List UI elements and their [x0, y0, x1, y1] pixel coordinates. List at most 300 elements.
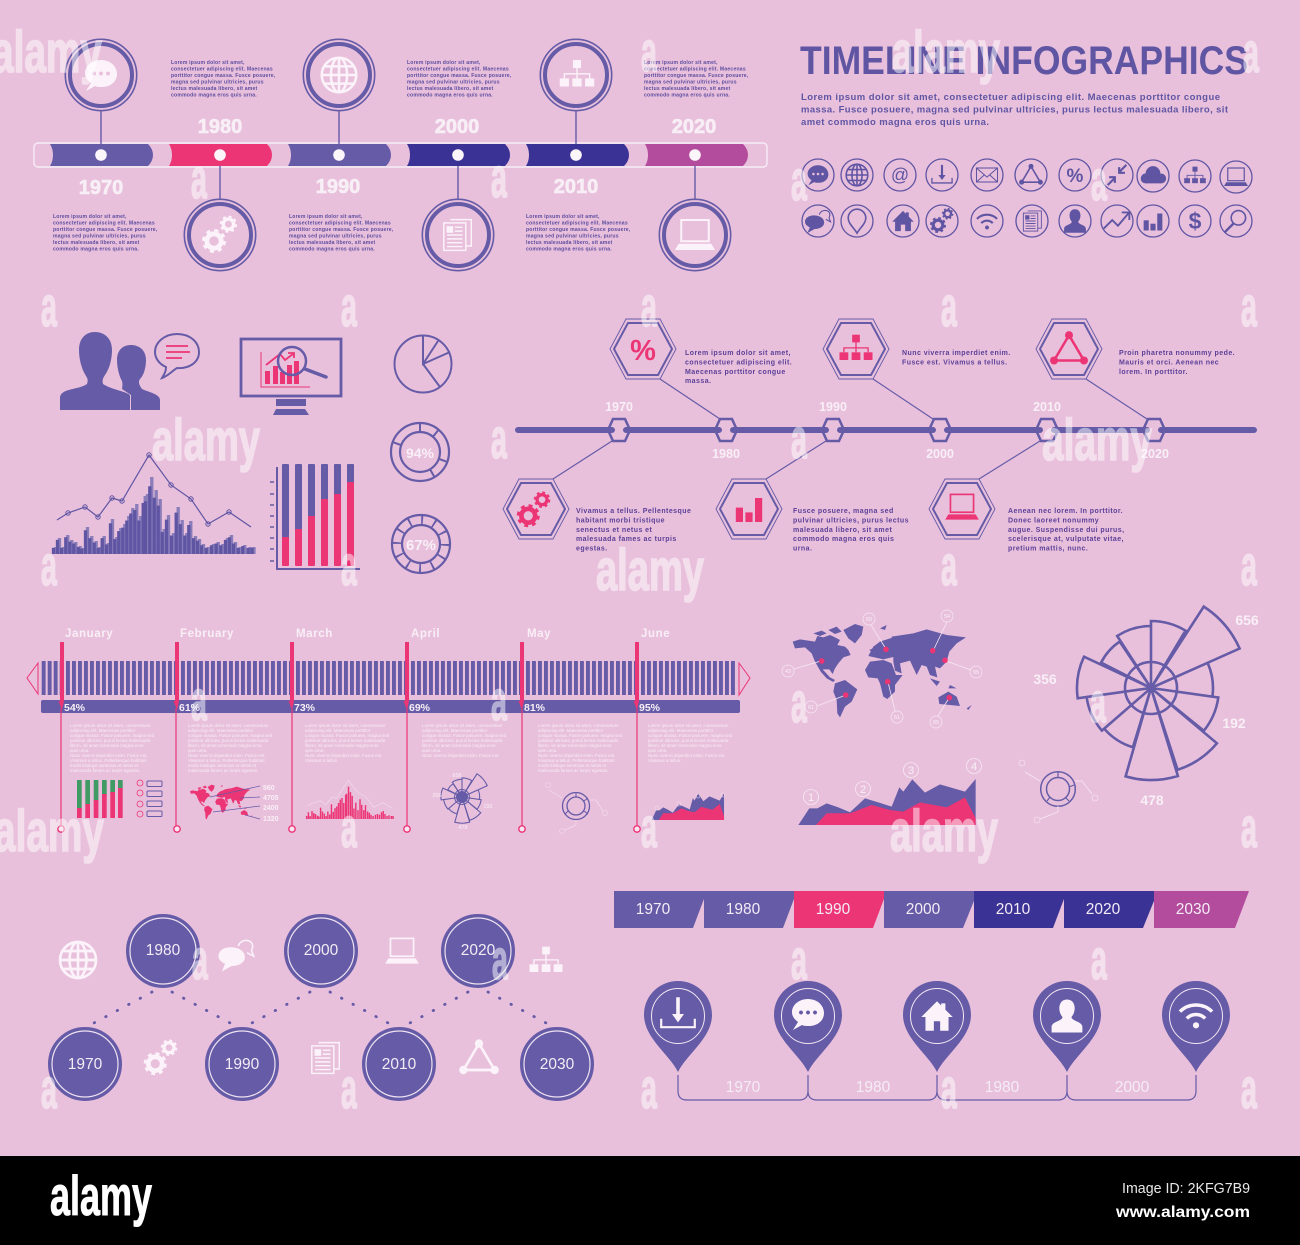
end arrows — [27, 663, 750, 695]
icon: cloud — [1141, 166, 1166, 183]
area numbered markers — [804, 758, 982, 804]
mini bar chart — [307, 780, 393, 819]
mini legend — [137, 780, 162, 817]
June text: adipiscing elit. Maecenas porttitor — [648, 728, 714, 733]
month labels — [65, 628, 670, 640]
icon: gears — [931, 209, 953, 232]
connector lines — [553, 379, 1147, 479]
icon: org chart — [560, 60, 594, 86]
icon: person — [1052, 1000, 1082, 1032]
icon: laptop — [945, 494, 979, 520]
June text: libero, sit amet commodo magna eros — [648, 743, 722, 748]
text block: urna. — [793, 546, 812, 553]
text block: malesuada libero, sit amet — [793, 527, 892, 534]
June text: Lorem ipsum dolor sit amet, consectetuer — [648, 723, 729, 728]
watermarks: a — [492, 927, 508, 992]
May text: pulvinar ultricies, purus lectus malesuada — [538, 738, 619, 743]
watermarks: a — [1241, 274, 1257, 339]
donut 67%: 67% — [406, 537, 436, 554]
mini rose chart: 478 — [458, 825, 468, 831]
watermarks: a — [641, 19, 657, 84]
icon: percent: % — [1067, 166, 1084, 187]
April text: adipiscing elit. Maecenas porttitor — [422, 728, 488, 733]
small donut callout — [1019, 760, 1098, 823]
text block 2010: Lorem ipsum dolor sit amet, — [526, 214, 600, 220]
March text: libero, sit amet commodo magna eros — [305, 743, 379, 748]
year circles: 1980 — [146, 942, 181, 959]
text block 2000: commodo magna eros quis urna. — [407, 92, 493, 98]
icon: speech bubbles — [218, 940, 254, 972]
striped bar — [42, 661, 737, 695]
May text: libero, sit amet commodo magna eros — [538, 743, 612, 748]
area numbers: 4 — [971, 761, 977, 773]
marker stems — [61, 708, 637, 826]
year labels — [79, 116, 716, 199]
mini map callouts — [210, 785, 279, 823]
February text: malesuada fames ac turpis egestas. — [188, 768, 258, 773]
node dots — [95, 149, 701, 161]
panel: dotted circles timeline — [49, 915, 593, 1100]
panel: hexagon timeline — [503, 319, 1254, 553]
month labels: June — [641, 628, 670, 640]
icon: monitor with chart — [241, 339, 341, 415]
mini rose chart: 356 — [432, 793, 442, 799]
mini map callouts: 1320 — [263, 816, 279, 823]
text block 1970: consectetuer adipiscing elit. Maecenas — [53, 220, 155, 226]
watermarks: alamy — [892, 20, 1000, 85]
rose chart — [1033, 607, 1259, 808]
icon: mail — [976, 168, 998, 182]
watermarks: a — [341, 795, 357, 860]
icon: house — [921, 1001, 953, 1031]
watermarks: alamy — [890, 799, 998, 864]
year circles: 2010 — [382, 1056, 417, 1073]
mini rose chart: 656 — [452, 773, 462, 779]
icon: org chart — [840, 335, 872, 360]
watermarks: a — [341, 274, 357, 339]
icon: triangle — [1050, 331, 1088, 365]
icon circles — [802, 159, 1252, 237]
icon: gears — [145, 1040, 176, 1074]
January text: congue massa. Fusce posuere, magna sed — [70, 733, 155, 738]
text block 1980: magna sed pulvinar ultricies, purus — [171, 80, 264, 86]
icon: triangle — [1019, 164, 1043, 185]
panel: year tabs — [614, 891, 1249, 928]
panel: year tabs: 2010 — [996, 901, 1031, 918]
icon: documents — [312, 1043, 339, 1073]
text block 2000: lectus malesuada libero, sit amet — [407, 86, 494, 92]
text block: lorem. In porttitor. — [1119, 369, 1188, 376]
June text: Nunc viverra imperdiet enim. Fusce est. — [648, 753, 725, 758]
watermarks: alamy — [152, 408, 260, 473]
watermarks: a — [1241, 795, 1257, 860]
footer band — [0, 1156, 1300, 1245]
intro paragraph: amet commodo magna eros quis urna. — [801, 117, 989, 128]
area numbers: 1 — [808, 792, 814, 804]
watermarks: a — [341, 1056, 357, 1121]
year labels: 1990 — [316, 176, 360, 198]
text block 1990: lectus malesuada libero, sit amet — [289, 240, 376, 246]
bracket year labels: 1980 — [856, 1079, 891, 1096]
icon: chat — [792, 999, 824, 1030]
text block 1980: consectetuer adipiscing elit. Maecenas — [171, 66, 273, 72]
text block: malesuada fames ac turpis — [576, 536, 677, 543]
icon: documents — [444, 220, 471, 250]
June text: congue massa. Fusce posuere, magna sed — [648, 733, 733, 738]
watermarks: a — [491, 145, 507, 210]
year labels: 1970 — [79, 177, 123, 199]
text block: augue. Suspendisse dui purus, — [1008, 527, 1125, 534]
watermarks: a — [941, 274, 957, 339]
map callout lines — [794, 622, 971, 716]
text block 1970: magna sed pulvinar ultricies, purus — [53, 234, 146, 240]
watermarks: a — [41, 1056, 57, 1121]
January text: pulvinar ultricies, purus lectus malesuada — [70, 738, 151, 743]
icon: gears — [204, 217, 236, 251]
text block 1990: consectetuer adipiscing elit. Maecenas — [289, 220, 391, 226]
text block 2020: commodo magna eros quis urna. — [644, 92, 730, 98]
map numbers — [785, 614, 979, 726]
watermarks: a — [791, 406, 807, 471]
text block: Fusce posuere, magna sed — [793, 508, 894, 515]
watermarks: a — [1241, 1056, 1257, 1121]
map markers — [819, 646, 952, 700]
year labels: 1970 — [605, 400, 633, 414]
percent labels: 73% — [294, 702, 316, 714]
watermarks: a — [1090, 670, 1106, 735]
map labels — [782, 610, 982, 728]
icon: house — [892, 211, 914, 231]
text block 2010: porttitor congue massa. Fusce posuere, — [526, 227, 631, 233]
mini area chart — [652, 793, 725, 820]
text block 2020: Lorem ipsum dolor sit amet, — [644, 60, 718, 66]
percent labels: 69% — [409, 702, 431, 714]
dotted connectors — [92, 992, 548, 1024]
March text: Lorem ipsum dolor sit amet, consectetuer — [305, 723, 386, 728]
percent labels: 61% — [179, 702, 201, 714]
text block 2020: consectetuer adipiscing elit. Maecenas — [644, 66, 746, 72]
map numbers: 61 — [808, 705, 814, 711]
percent labels: 95% — [639, 702, 661, 714]
March text: adipiscing elit. Maecenas porttitor — [305, 728, 371, 733]
watermarks: a — [941, 533, 957, 598]
panel: year tabs: 2000 — [906, 901, 941, 918]
text block 2010: lectus malesuada libero, sit amet — [526, 240, 613, 246]
bracket connectors — [678, 1075, 1196, 1100]
area numbers: 3 — [908, 765, 914, 777]
watermarks: a — [641, 1056, 657, 1121]
text block 1990: commodo magna eros quis urna. — [289, 246, 375, 252]
icon: percent: % — [630, 335, 656, 367]
icon: org chart — [530, 947, 562, 972]
rose chart: 356 — [1033, 671, 1057, 687]
text block: Proin pharetra nonummy pede. — [1119, 350, 1235, 357]
marker ends — [58, 826, 640, 832]
watermarks: a — [1091, 148, 1107, 213]
year circles: 2030 — [540, 1056, 575, 1073]
February text: adipiscing elit. Maecenas porttitor — [188, 728, 254, 733]
text block 1990: magna sed pulvinar ultricies, purus — [289, 234, 382, 240]
text block: habitant morbi tristique — [576, 517, 665, 524]
March text: Vivamus a tellus. — [305, 758, 338, 763]
year circles: 1970 — [68, 1056, 103, 1073]
year labels: 1990 — [819, 400, 847, 414]
February text: Nunc viverra imperdiet enim. Fusce est. — [188, 753, 265, 758]
icon: laptop — [385, 938, 419, 964]
January text: Lorem ipsum dolor sit amet, consectetuer — [70, 723, 151, 728]
text block 1990: Lorem ipsum dolor sit amet, — [289, 214, 363, 220]
watermarks: a — [1091, 927, 1107, 992]
month labels: May — [527, 628, 551, 640]
text block: Donec laoreet nonummy — [1008, 517, 1099, 524]
map numbers: 51 — [894, 715, 900, 721]
year labels: 1980 — [712, 447, 740, 461]
April text: Nunc viverra imperdiet enim. Fusce est. — [422, 753, 499, 758]
area numbers — [808, 761, 977, 804]
mini rose chart: 192 — [483, 804, 493, 810]
February text: congue massa. Fusce posuere, magna sed — [188, 733, 273, 738]
panel: year tabs: 1980 — [726, 901, 761, 918]
watermarks: a — [791, 670, 807, 735]
April text: congue massa. Fusce posuere, magna sed — [422, 733, 507, 738]
year labels: 2010 — [1033, 400, 1061, 414]
text block: massa. — [685, 378, 711, 385]
text block 1970: lectus malesuada libero, sit amet — [53, 240, 140, 246]
icon: download — [661, 997, 695, 1027]
text block 2020: porttitor congue massa. Fusce posuere, — [644, 73, 749, 79]
watermarks: a — [1243, 20, 1259, 85]
bar and line chart — [54, 453, 254, 554]
rose chart: 478 — [1140, 792, 1164, 808]
icon: globe — [846, 164, 868, 186]
text block: Aenean nec lorem. In porttitor. — [1008, 508, 1123, 515]
icon: globe — [322, 58, 356, 92]
text block 1980: porttitor congue massa. Fusce posuere, — [171, 73, 276, 79]
icon: globe — [60, 942, 96, 978]
May text: adipiscing elit. Maecenas porttitor — [538, 728, 604, 733]
watermarks: a — [191, 668, 207, 733]
month labels: April — [411, 628, 440, 640]
mini map callouts: 4705 — [263, 795, 279, 802]
mini rose chart — [432, 773, 493, 831]
icon: bars — [736, 498, 762, 522]
text block: Maecenas porttitor congue — [685, 369, 786, 376]
panel: top circular timeline — [34, 39, 767, 271]
icon: at sign: @ — [891, 165, 909, 185]
icon: documents — [1023, 211, 1041, 231]
year labels: 1980 — [198, 116, 242, 138]
text block 2000: magna sed pulvinar ultricies, purus — [407, 80, 500, 86]
watermarks: a — [341, 533, 357, 598]
June text: Vivamus a tellus. — [648, 758, 681, 763]
text block: scelerisque at, vulputate vitae, — [1008, 536, 1124, 543]
bracket year labels: 2000 — [1115, 1079, 1150, 1096]
rose chart: 192 — [1222, 715, 1246, 731]
June text: pulvinar ultricies, purus lectus malesuada — [648, 738, 729, 743]
percent labels: 54% — [64, 702, 86, 714]
text block 2010: commodo magna eros quis urna. — [526, 246, 612, 252]
panel: year tabs: 2020 — [1086, 901, 1121, 918]
icon: arrows — [1108, 165, 1126, 185]
May text: malesuada fames ac turpis egestas. — [538, 768, 608, 773]
February text: pulvinar ultricies, purus lectus malesuada — [188, 738, 269, 743]
watermarks: a — [941, 1056, 957, 1121]
text block: Vivamus a tellus. Pellentesque — [576, 508, 691, 515]
year circles — [49, 915, 593, 1100]
year labels — [605, 400, 1169, 461]
watermarks: a — [791, 148, 807, 213]
text block 1970: Lorem ipsum dolor sit amet, — [53, 214, 127, 220]
March text: pulvinar ultricies, purus lectus malesuada — [305, 738, 386, 743]
panel: year tabs: 1970 — [636, 901, 671, 918]
icon: dollar: $ — [1189, 208, 1202, 234]
text block: senectus et netus et — [576, 527, 653, 534]
image id: Image ID: 2KFG7B9 — [1122, 1181, 1250, 1197]
text block 1980: Lorem ipsum dolor sit amet, — [171, 60, 245, 66]
February text: morbi tristique senectus et netus et — [188, 763, 257, 768]
text block: egestas. — [576, 546, 608, 553]
website: www.alamy.com — [1115, 1204, 1250, 1221]
watermarks: a — [491, 668, 507, 733]
text block 2000: porttitor congue massa. Fusce posuere, — [407, 73, 512, 79]
text block 2010: consectetuer adipiscing elit. Maecenas — [526, 220, 628, 226]
pin rings — [652, 988, 1222, 1044]
watermarks: a — [1241, 533, 1257, 598]
May text: Vivamus a tellus. Pellentesque habitant — [538, 758, 615, 763]
stems — [101, 111, 695, 199]
icon: chat — [808, 165, 828, 185]
large hexagons — [503, 319, 1102, 539]
icon: chat — [85, 60, 117, 91]
March text: quis urna. — [305, 748, 324, 753]
percent labels — [64, 702, 661, 714]
icon: gears — [518, 492, 549, 526]
icon: wifi — [1180, 1005, 1212, 1028]
year circles: 2000 — [304, 942, 339, 959]
icon: triangle — [459, 1039, 499, 1074]
January text: Vivamus a tellus. Pellentesque habitant — [70, 758, 147, 763]
text block: Mauris et orci. Aenean nec — [1119, 359, 1219, 366]
March text: congue massa. Fusce posuere, magna sed — [305, 733, 390, 738]
February text: quis urna. — [188, 748, 207, 753]
March text: Nunc viverra imperdiet enim. Fusce est. — [305, 753, 382, 758]
January text: libero, sit amet commodo magna eros — [70, 743, 144, 748]
text block 2020: magna sed pulvinar ultricies, purus — [644, 80, 737, 86]
icon: laptop — [675, 220, 715, 250]
intro paragraph — [801, 92, 1229, 128]
icon: speech bubble — [155, 334, 199, 378]
watermarks: a — [41, 274, 57, 339]
month labels: February — [180, 628, 234, 640]
footer logo: alamy — [50, 1164, 152, 1227]
panel: icon grid — [802, 159, 1252, 237]
watermarks: alamy — [1042, 408, 1152, 473]
icon: person — [1064, 209, 1086, 233]
mini map callouts: 560 — [263, 785, 275, 792]
text block 1980: lectus malesuada libero, sit amet — [171, 86, 258, 92]
icon: pin — [848, 209, 866, 233]
mini map callouts: 2400 — [263, 805, 279, 812]
area numbers: 2 — [860, 784, 866, 796]
map numbers: 43 — [785, 669, 791, 675]
icon: bars — [1144, 214, 1162, 230]
timeline track — [34, 143, 767, 167]
map numbers: 54 — [944, 614, 950, 620]
mini stacked bars — [77, 780, 123, 818]
text block 1990: porttitor congue massa. Fusce posuere, — [289, 227, 394, 233]
small hex nodes — [608, 419, 1165, 441]
text block 2010: magna sed pulvinar ultricies, purus — [526, 234, 619, 240]
watermarks: a — [491, 406, 507, 471]
text block: commodo magna eros quis — [793, 536, 894, 543]
watermarks: alamy — [596, 538, 704, 603]
icon rings — [65, 39, 731, 271]
April text: pulvinar ultricies, purus lectus malesuada — [422, 738, 503, 743]
January text: morbi tristique senectus et netus et — [70, 763, 139, 768]
donut 94% — [391, 423, 449, 481]
bracket year labels: 1980 — [985, 1079, 1020, 1096]
February text: libero, sit amet commodo magna eros — [188, 743, 262, 748]
watermarks: a — [641, 795, 657, 860]
May text: Lorem ipsum dolor sit amet, consectetuer — [538, 723, 619, 728]
map numbers: 85 — [933, 720, 939, 726]
panel: map pins — [644, 981, 1230, 1100]
text block: Lorem ipsum dolor sit amet, — [685, 350, 791, 357]
May text: congue massa. Fusce posuere, magna sed — [538, 733, 623, 738]
icon: laptop — [1224, 168, 1248, 186]
text block: consectetuer adipiscing elit. — [685, 359, 792, 366]
rose chart: 656 — [1235, 612, 1259, 628]
progress bar — [41, 700, 740, 713]
May text: Nunc viverra imperdiet enim. Fusce est. — [538, 753, 615, 758]
bracket year labels — [726, 1079, 1150, 1096]
panel: year tabs: 1990 — [816, 901, 851, 918]
world map — [782, 610, 982, 728]
May text: quis urna. — [538, 748, 557, 753]
bracket year labels: 1970 — [726, 1079, 761, 1096]
text block 1970: porttitor congue massa. Fusce posuere, — [53, 227, 158, 233]
timeline segments — [50, 144, 748, 166]
watermarks: a — [641, 274, 657, 339]
text block 1970: commodo magna eros quis urna. — [53, 246, 139, 252]
icon: magnifier — [1225, 211, 1246, 232]
month labels: March — [296, 628, 333, 640]
map numbers: 95 — [973, 670, 979, 676]
year labels: 2000 — [435, 116, 479, 138]
panel: monthly timeline — [27, 628, 750, 834]
January text: Nunc viverra imperdiet enim. Fusce est. — [70, 753, 147, 758]
percent labels: 81% — [524, 702, 546, 714]
icon: speech bubbles — [805, 210, 831, 233]
icon: trend — [1104, 212, 1129, 229]
pin shapes — [644, 981, 1230, 1072]
January text: quis urna. — [70, 748, 89, 753]
February text: Lorem ipsum dolor sit amet, consectetuer — [188, 723, 269, 728]
mini world map — [190, 785, 252, 820]
axis — [518, 427, 1254, 433]
January text: malesuada fames ac turpis egestas. — [70, 768, 140, 773]
February text: Vivamus a tellus. Pellentesque habitant — [188, 758, 265, 763]
title: TIMELINE INFOGRAPHICS — [800, 39, 1248, 83]
text block 2020: lectus malesuada libero, sit amet — [644, 86, 731, 92]
year labels: 2020 — [672, 116, 716, 138]
icon: people — [60, 332, 160, 410]
January text: adipiscing elit. Maecenas porttitor — [70, 728, 136, 733]
year circles: 1990 — [225, 1056, 260, 1073]
watermarks: a — [192, 927, 208, 992]
May text: morbi tristique senectus et netus et — [538, 763, 607, 768]
text block: pretium mattis, nunc. — [1008, 546, 1088, 553]
